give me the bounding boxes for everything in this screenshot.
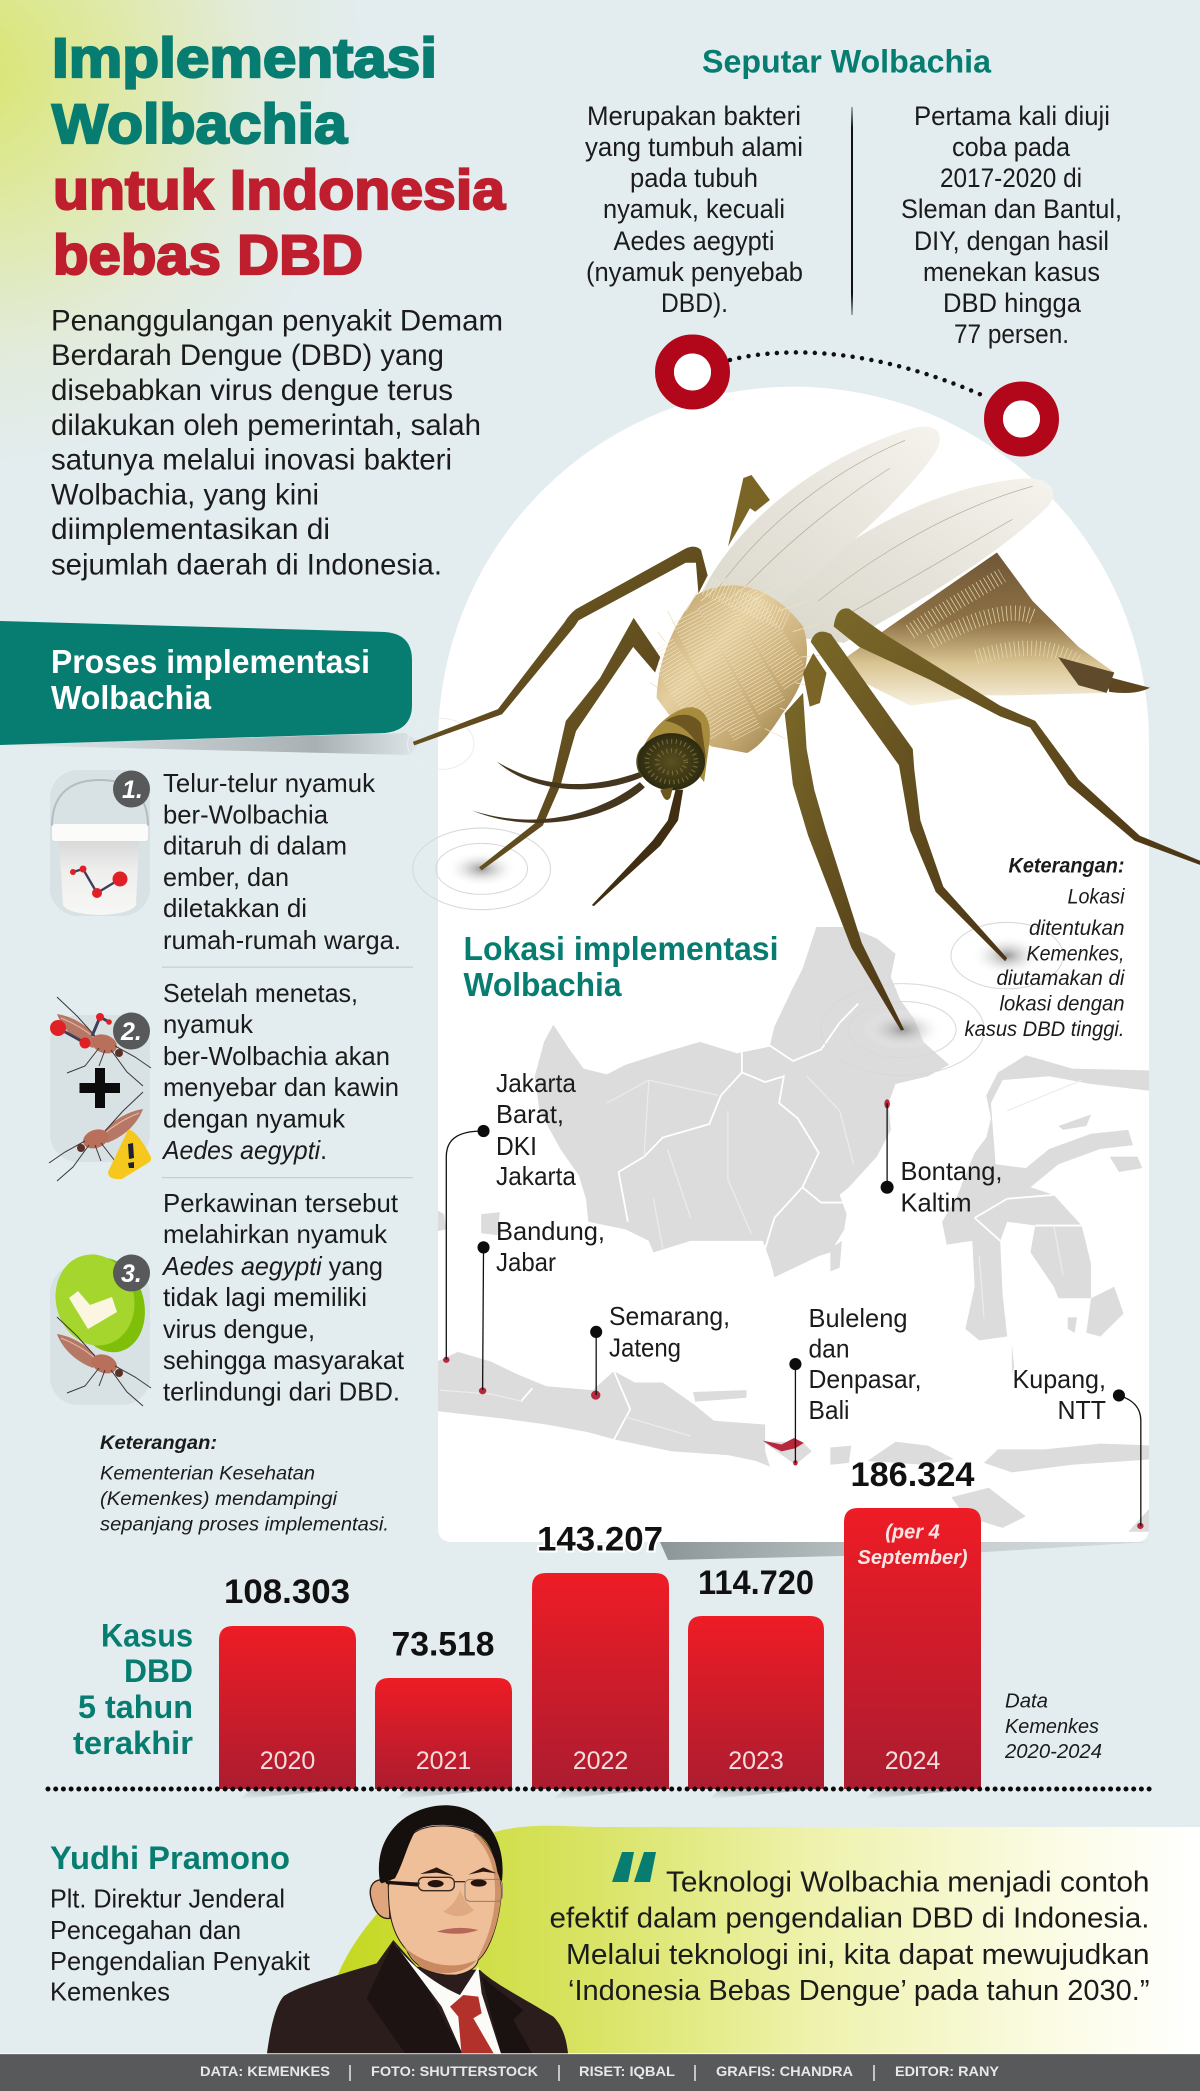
text: step 3: virus dengue,	[163, 1314, 315, 1344]
note: Kemenkes assists: (Kemenkes) mendampingi	[100, 1488, 338, 1510]
intro paragraph: Wolbachia, yang kini	[51, 478, 319, 512]
intro paragraph	[51, 304, 503, 582]
badge: step 3: 3.	[121, 1260, 142, 1288]
title: untuk Indonesia	[53, 158, 506, 221]
label: Bali: Denpasar,	[808, 1364, 922, 1394]
label: Bontang	[900, 1156, 1002, 1218]
heading: location: Wolbachia	[464, 966, 622, 1003]
heading: chart title: DBD	[124, 1653, 193, 1689]
dotted connector	[730, 352, 984, 396]
quote text: Melalui teknologi ini, kita dapat mewujudkan	[566, 1939, 1150, 1971]
icon: portrait of Yudhi Pramono	[267, 1805, 568, 2056]
text: step 2: Aedes aegypti.	[161, 1135, 327, 1165]
text: what Wolbachia is: nyamuk, kecuali	[603, 194, 785, 224]
text: step 2: nyamuk	[163, 1009, 254, 1039]
text: first trial	[901, 101, 1122, 349]
icon: mosquito illustration	[413, 427, 1200, 1031]
divider: Wolbachia columns	[851, 107, 853, 315]
panel: quote background	[337, 1826, 1200, 2054]
text: what Wolbachia is: (nyamuk penyebab	[586, 257, 803, 287]
quote text: ‘Indonesia Bebas Dengue’ pada tahun 2030.”	[568, 1975, 1150, 2007]
label: Jakarta: Jakarta	[496, 1161, 577, 1191]
text: step 3: melahirkan nyamuk	[163, 1219, 388, 1249]
icon: step 3 shield and mosquito	[45, 1245, 155, 1406]
badge: step 1: 1.	[122, 776, 143, 804]
quote text: efektif dalam pengendalian DBD di Indonesia.	[550, 1902, 1150, 1934]
note: Kemenkes assists: Keterangan:	[100, 1432, 217, 1454]
badge: step 1	[113, 770, 150, 808]
bar chart: 114.720	[698, 1564, 814, 1602]
label: Bali: Buleleng	[808, 1303, 908, 1333]
text: step 3	[161, 1188, 405, 1406]
text: step 1	[163, 768, 401, 955]
text: person name and title: Plt. Direktur Jenderal	[50, 1884, 285, 1914]
text: what Wolbachia is: yang tumbuh alami	[585, 132, 803, 162]
text: first trial: 77 persen.	[954, 319, 1069, 349]
quote text	[550, 1866, 1150, 2007]
bar chart: 108.303	[224, 1573, 350, 1611]
text: step 2	[161, 978, 399, 1165]
ring marker: left	[664, 344, 720, 400]
label: Jakarta: DKI	[496, 1131, 537, 1161]
note: chart source: Data	[1005, 1690, 1048, 1712]
label: Bali	[808, 1303, 922, 1425]
text: first trial: DBD hingga	[943, 288, 1081, 318]
text: step 2: dengan nyamuk	[163, 1104, 346, 1134]
label: Jakarta: Jakarta	[496, 1068, 577, 1098]
text: step 1: ber-Wolbachia	[163, 800, 329, 830]
bar chart: 2021	[416, 1747, 471, 1775]
text: person name and title: Yudhi Pramono	[50, 1840, 290, 1876]
label: Bandung: Jabar	[496, 1247, 556, 1277]
bar chart: 2022	[573, 1747, 628, 1775]
panel: process banner: Proses implementasi	[51, 643, 370, 680]
label: Semarang	[609, 1301, 730, 1362]
label: Bali: dan	[808, 1334, 850, 1364]
label: Semarang: Semarang,	[609, 1301, 730, 1331]
label: Kupang: NTT	[1058, 1395, 1106, 1425]
bar chart: 186.324	[850, 1456, 975, 1494]
label: Bontang: Bontang,	[900, 1156, 1002, 1186]
heading: location: Lokasi implementasi	[464, 930, 778, 967]
intro paragraph: Berdarah Dengue (DBD) yang	[51, 339, 444, 372]
bar chart	[219, 1456, 981, 1799]
text: step 3: sehingga masyarakat	[163, 1345, 405, 1375]
text: first trial: menekan kasus	[923, 257, 1100, 287]
icon: step 2 mosquitoes and warning	[49, 997, 151, 1181]
bar chart: 2023	[728, 1747, 784, 1775]
text: step 2: ber-Wolbachia akan	[163, 1041, 390, 1071]
ring marker: right	[994, 391, 1050, 447]
text: step 1: ditaruh di dalam	[163, 830, 347, 860]
label: Kupang	[1012, 1364, 1106, 1425]
text: step 1: Telur-telur nyamuk	[163, 768, 376, 798]
text: step 1: ember, dan	[163, 862, 289, 892]
bar chart: 73.518	[392, 1626, 494, 1664]
white arch panel	[438, 387, 1150, 1560]
bar chart: 143.207	[537, 1520, 663, 1558]
title	[52, 26, 506, 286]
quote text: Teknologi Wolbachia menjadi contoh	[666, 1866, 1150, 1898]
note: chart source	[1004, 1690, 1102, 1763]
note: location criteria: Kemenkes,	[1026, 942, 1124, 966]
note: Kemenkes assists	[100, 1432, 389, 1536]
heading: chart title: Kasus	[101, 1618, 193, 1654]
bar chart: 2020	[260, 1747, 315, 1775]
text: step 2: menyebar dan kawin	[163, 1072, 399, 1102]
label: Jakarta	[496, 1068, 577, 1191]
ripple shadows under mosquito legs	[408, 718, 1063, 1076]
panel: process banner	[0, 621, 420, 755]
note: chart source: Kemenkes	[1005, 1716, 1099, 1738]
note: location criteria: kasus DBD tinggi.	[964, 1017, 1124, 1041]
text: step 3: tidak lagi memiliki	[163, 1282, 367, 1312]
footer credits: GRAFIS: CHANDRA	[716, 2063, 853, 2079]
text: what Wolbachia is: DBD).	[661, 288, 728, 318]
text: first trial: Pertama kali diuji	[914, 101, 1110, 131]
note: location criteria: ditentukan	[1029, 916, 1124, 940]
intro paragraph: disebabkan virus dengue terus	[51, 374, 453, 407]
intro paragraph: sejumlah daerah di Indonesia.	[51, 548, 442, 582]
text: first trial: Sleman dan Bantul,	[901, 194, 1122, 224]
map of Indonesia	[437, 927, 1156, 1532]
label: Bandung: Bandung,	[496, 1216, 605, 1246]
icon: quotation mark	[612, 1852, 656, 1882]
heading: chart title: terakhir	[73, 1725, 193, 1761]
label: Bontang: Kaltim	[900, 1188, 972, 1218]
note: location criteria	[964, 854, 1126, 1041]
text: what Wolbachia is: Merupakan bakteri	[587, 101, 801, 131]
label: Bandung	[496, 1216, 605, 1277]
note: location criteria: lokasi dengan	[1000, 992, 1124, 1016]
text: first trial: coba pada	[952, 132, 1070, 162]
footer credits: FOTO: SHUTTERSTOCK	[371, 2063, 538, 2079]
badge: step 2	[113, 1012, 150, 1050]
text: step 1: diletakkan di	[163, 893, 307, 923]
heading: location	[464, 930, 778, 1003]
text: first trial: DIY, dengan hasil	[914, 226, 1109, 256]
title: Implementasi	[52, 26, 437, 89]
text: person name and title: Pencegahan dan	[50, 1915, 241, 1945]
footer credits	[0, 2053, 1200, 2091]
footer credits: DATA: KEMENKES	[200, 2063, 330, 2079]
note: chart source: 2020-2024	[1004, 1741, 1102, 1763]
text: step 1: rumah-rumah warga.	[163, 925, 401, 955]
intro paragraph: dilakukan oleh pemerintah, salah	[51, 409, 481, 442]
text: what Wolbachia is: pada tubuh	[630, 163, 758, 193]
title: Wolbachia	[52, 92, 348, 155]
label: Kupang: Kupang,	[1012, 1364, 1106, 1394]
heading: chart title	[73, 1618, 193, 1761]
icon: step 1 bucket	[50, 770, 150, 916]
text: step 3: Aedes aegypti yang	[161, 1251, 383, 1281]
badge: step 2: 2.	[120, 1018, 142, 1046]
bar chart: 2024	[885, 1747, 940, 1775]
intro paragraph: satunya melalui inovasi bakteri	[51, 444, 452, 476]
label: Bali: Bali	[808, 1395, 850, 1425]
text: step 3: terlindungi dari DBD.	[163, 1376, 400, 1406]
text: what Wolbachia is: Aedes aegypti	[614, 226, 774, 256]
intro paragraph: Penanggulangan penyakit Demam	[51, 304, 503, 338]
note: Kemenkes assists: sepanjang proses implementasi.	[100, 1514, 389, 1536]
footer credits: EDITOR: RANY	[895, 2063, 1000, 2079]
text: step 2: Setelah menetas,	[163, 978, 358, 1008]
bar chart: September)	[857, 1547, 968, 1569]
panel: process banner: Wolbachia	[51, 679, 212, 716]
label: Semarang: Jateng	[609, 1332, 681, 1362]
text: person name and title: Pengendalian Penyakit	[50, 1946, 311, 1976]
note: location criteria: diutamakan di	[996, 966, 1126, 990]
note: location criteria: Keterangan:	[1008, 854, 1124, 878]
text: person name and title: Kemenkes	[50, 1976, 170, 2006]
text: person name and title	[50, 1840, 311, 2006]
footer credits: RISET: IQBAL	[579, 2063, 675, 2079]
text: first trial: 2017-2020 di	[940, 163, 1082, 193]
heading: chart title: 5 tahun	[78, 1689, 193, 1725]
heading: Seputar Wolbachia: Seputar Wolbachia	[702, 44, 991, 80]
title: bebas DBD	[53, 223, 363, 286]
text: what Wolbachia is	[585, 101, 803, 318]
bar chart: (per 4	[885, 1522, 940, 1544]
note: location criteria: Lokasi	[1068, 884, 1126, 908]
note: Kemenkes assists: Kementerian Kesehatan	[100, 1462, 315, 1484]
label: Jakarta: Barat,	[496, 1099, 564, 1129]
text: step 3: Perkawinan tersebut	[163, 1188, 399, 1218]
badge: step 3	[113, 1254, 150, 1292]
intro paragraph: diimplementasikan di	[51, 513, 330, 546]
